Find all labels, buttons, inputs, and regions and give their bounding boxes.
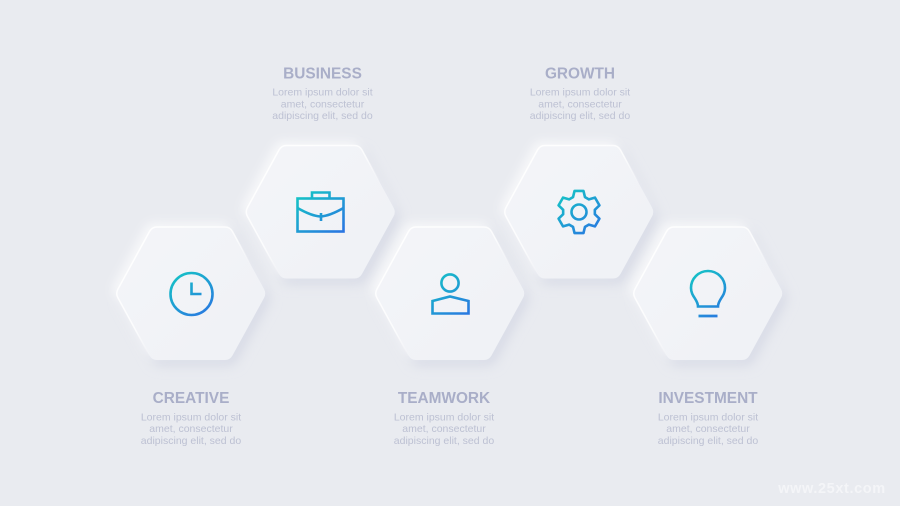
text block: business: amet, consectetur <box>281 98 365 110</box>
panel: growth hexagon <box>501 142 657 284</box>
panel: investment hexagon <box>630 223 786 365</box>
panel: creative hexagon <box>113 223 269 365</box>
text block: growth: amet, consectetur <box>538 98 622 110</box>
panel: business hexagon <box>242 142 399 284</box>
text block: teamwork: Lorem ipsum dolor sit <box>394 412 494 424</box>
text block: teamwork: amet, consectetur <box>402 423 486 435</box>
heading: growth: GROWTH <box>545 66 615 82</box>
heading: teamwork: TEAMWORK <box>398 390 490 407</box>
icon: clock <box>170 273 212 315</box>
text block: teamwork: adipiscing elit, sed do <box>394 435 494 447</box>
text block: growth: adipiscing elit, sed do <box>530 110 630 122</box>
icon: gear <box>559 191 599 233</box>
text block: business: adipiscing elit, sed do <box>272 110 373 122</box>
heading: creative: CREATIVE <box>153 390 229 407</box>
panel: teamwork hexagon <box>372 223 528 365</box>
heading: business: BUSINESS <box>283 66 362 82</box>
icon: briefcase <box>298 192 344 232</box>
text block: investment: adipiscing elit, sed do <box>658 435 758 447</box>
watermark: www.25xt.com <box>777 481 886 497</box>
text block: creative: amet, consectetur <box>149 423 233 435</box>
text block: investment: amet, consectetur <box>666 423 750 435</box>
text block: business: Lorem ipsum dolor sit <box>272 86 373 98</box>
text block: creative: adipiscing elit, sed do <box>141 435 241 447</box>
text block: investment: Lorem ipsum dolor sit <box>658 412 758 424</box>
icon: person <box>432 274 468 314</box>
text block: creative: Lorem ipsum dolor sit <box>141 412 241 424</box>
heading: investment: INVESTMENT <box>658 390 758 407</box>
icon: light bulb <box>691 271 725 316</box>
text block: growth: Lorem ipsum dolor sit <box>530 86 630 98</box>
